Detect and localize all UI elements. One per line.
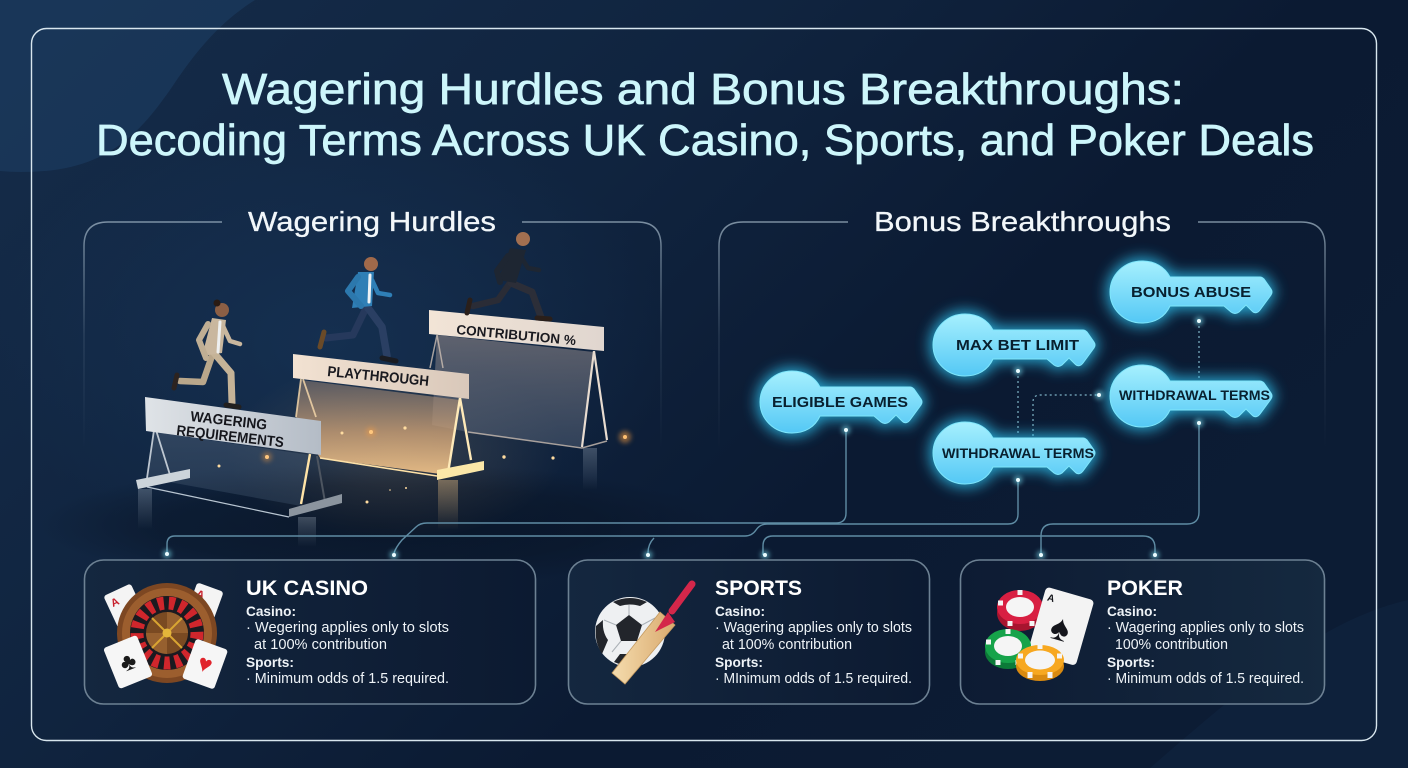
text: sports [715,577,912,687]
key: withdrawal terms lower: WITHDRAWAL TERMS [942,445,1094,461]
key: bonus abuse: BONUS ABUSE [1131,284,1251,301]
text: sports: Casino: [715,603,765,619]
text: poker: Sports: [1107,654,1155,670]
icon: roulette wheel and cards: A [194,588,206,602]
text: uk casino: Sports: [246,654,294,670]
key: withdrawal terms upper: WITHDRAWAL TERMS [1119,387,1270,403]
hurdle: contribution % [429,310,607,448]
text: sports: SPORTS [715,577,802,600]
runner 3 [467,232,550,319]
text: uk casino: UK CASINO [246,577,368,600]
key: withdrawal terms upper [1110,365,1272,427]
icon: football and cricket bat [595,584,692,684]
panel: wagering hurdles [84,206,661,450]
title [96,65,1314,165]
text: poker: Casino: [1107,603,1157,619]
text: poker: POKER [1107,577,1183,600]
floor and glow [40,360,720,587]
sparkles [218,426,631,504]
hurdle: playthrough [293,354,484,480]
icon: poker chips and ace of spades: ♠ [1046,605,1075,650]
runner 2 [320,257,396,361]
hurdle: wagering requirements [136,397,342,517]
connector lines [167,423,1199,555]
text: sports: · Wagering applies only to slots [715,620,912,636]
text: uk casino: at 100% contribution [254,637,387,653]
key: eligible games: ELIGIBLE GAMES [772,394,908,411]
key: max bet limit: MAX BET LIMIT [956,337,1079,354]
key: eligible games [760,371,922,433]
icon: roulette wheel and cards [103,582,228,690]
text: uk casino: Casino: [246,603,296,619]
text: poker [1107,577,1304,687]
card: uk casino [84,560,536,704]
icon: poker chips and ace of spades [985,587,1094,681]
connector nodes [162,316,1204,560]
text: poker: 100% contribution [1115,637,1228,653]
icon: roulette wheel and cards: ♣ [116,647,141,678]
hurdle label: playthrough: PLAYTHROUGH [327,364,430,390]
icon: poker chips and ace of spades: A [1046,593,1056,605]
text: sports: · MInimum odds of 1.5 required. [715,671,912,687]
runner 1 [174,300,240,407]
hurdle label: wagering requirements: WAGERING [190,409,268,434]
key: withdrawal terms lower [933,422,1095,484]
dotted connectors [1018,321,1199,436]
panel heading: bonus breakthroughs: Bonus Breakthroughs [874,206,1171,237]
key: max bet limit [933,314,1095,376]
panel heading: wagering hurdles: Wagering Hurdles [248,206,496,237]
text: sports: Sports: [715,654,763,670]
text: sports: at 100% contribution [722,637,852,653]
hurdle label: wagering requirements [176,409,285,451]
panel: bonus breakthroughs [719,206,1325,450]
card: poker [960,560,1324,704]
hurdle label: wagering requirements: REQUIREMENTS [176,423,285,451]
card: sports [568,560,930,704]
text: uk casino [246,577,449,687]
text: uk casino: · Wegering applies only to slots [246,620,449,636]
icon: roulette wheel and cards: A [109,596,121,610]
hurdle label: contribution: CONTRIBUTION % [456,322,577,348]
text: poker: · Wagering applies only to slots [1107,620,1304,636]
icon: roulette wheel and cards: ♥ [194,649,216,680]
text: uk casino: · Minimum odds of 1.5 required. [246,671,449,687]
key: bonus abuse [1110,261,1272,323]
title: Decoding Terms Across UK Casino, Sports, and Poker Deals [96,116,1314,165]
title: Wagering Hurdles and Bonus Breakthroughs: [222,65,1184,114]
text: poker: · Minimum odds of 1.5 required. [1107,671,1304,687]
